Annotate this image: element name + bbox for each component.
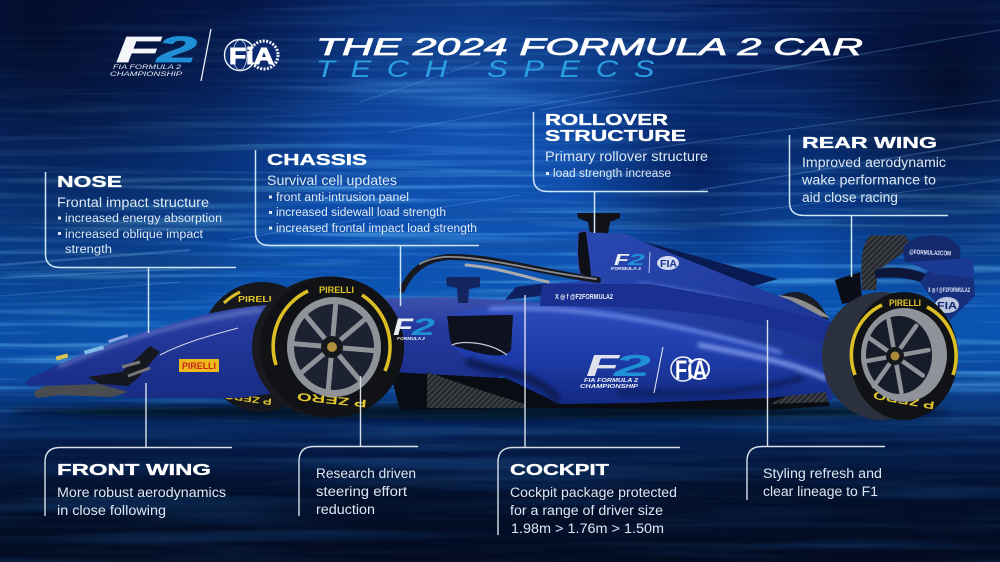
sidepod — [447, 304, 826, 404]
callout: steering: Research driven — [316, 466, 416, 481]
callout: cockpit: 1.98m > 1.76m > 1.50m — [511, 521, 664, 536]
nose details — [56, 328, 238, 386]
logo: F2 championship — [110, 29, 197, 78]
pirelli nose badge: PIRELLI — [182, 361, 216, 372]
callout: chassis — [256, 150, 479, 306]
chassis logo — [393, 314, 436, 341]
mirror — [446, 277, 480, 303]
callout: rear wing: REAR WING — [802, 135, 937, 152]
title — [316, 34, 863, 83]
logo: F2 championship: CHAMPIONSHIP — [110, 71, 183, 78]
callout: rollover structure: ROLLOVER — [545, 112, 669, 129]
logo: F2 championship: 2 — [155, 29, 197, 70]
chassis logo: 2 — [410, 314, 436, 341]
callout: nose: strength — [65, 244, 112, 256]
logo: F2 championship: FIA FORMULA 2 — [113, 64, 182, 71]
callout: cockpit — [498, 295, 680, 536]
callout: rollover structure: Primary rollover structure — [545, 149, 708, 164]
car shadow — [10, 405, 950, 419]
logo divider — [201, 29, 211, 81]
far front wheel: P ZERO — [223, 390, 272, 407]
callout: rear wing: Improved aerodynamic — [802, 155, 946, 170]
callout: rollover structure: STRUCTURE — [545, 128, 686, 145]
callout: rear wing: wake performance to — [801, 172, 936, 188]
rear wing: X ◎ f @F2FORMULA2 — [928, 288, 970, 294]
callout: styling — [747, 320, 885, 500]
far front wheel: PIRELLI — [238, 294, 278, 304]
callout: cockpit: for a range of driver size — [510, 503, 663, 518]
title: THE 2024 FORMULA 2 CAR — [316, 34, 863, 61]
engine cover logos: F — [614, 252, 631, 269]
logo: FIA — [224, 40, 278, 70]
callout: chassis: increased frontal impact load strength — [276, 223, 477, 235]
callout: chassis: front anti-intrusion panel — [276, 192, 409, 204]
engine cover logos: FORMULA 2 — [611, 266, 642, 271]
callout: cockpit: COCKPIT — [510, 462, 609, 479]
sidepod logos: FiA — [675, 355, 707, 385]
logo: F2 championship: F — [116, 29, 162, 70]
callout: front wing: FRONT WING — [57, 462, 211, 479]
callout: rollover structure — [534, 112, 708, 233]
callout: chassis: CHASSIS — [267, 152, 367, 169]
callout: rollover structure: load strength increase — [553, 168, 671, 180]
callout: styling: clear lineage to F1 — [763, 484, 878, 499]
rear wing: FIA — [937, 301, 957, 312]
cockpit rim — [505, 283, 547, 300]
sidepod logos: F — [586, 348, 621, 383]
sidepod logos: CHAMPIONSHIP — [580, 384, 638, 390]
callout: rear wing: aid close racing — [802, 190, 898, 205]
front wheel: PIRELLI — [319, 285, 354, 296]
rear wheel: P ZERO — [872, 388, 936, 411]
front wheel: P ZERO — [296, 390, 367, 409]
car — [10, 213, 975, 420]
shoulder panel — [540, 284, 832, 345]
engine cover logos: FIA — [660, 259, 677, 270]
chassis logo: FORMULA 2 — [397, 336, 426, 341]
callout: front wing — [45, 383, 232, 518]
sidepod logos: FIA FORMULA 2 — [584, 378, 638, 384]
front wheel — [252, 276, 404, 418]
callout: nose: Frontal impact structure — [57, 195, 209, 210]
rear wheel: PIRELLI — [889, 298, 921, 309]
halo — [402, 257, 598, 290]
body highlights — [60, 284, 830, 398]
airbox and roll hoop — [577, 213, 620, 278]
callout: nose: NOSE — [57, 174, 122, 191]
far rear wheel — [757, 292, 833, 398]
callout: chassis: increased sidewall load strength — [276, 207, 446, 219]
callout: steering — [299, 376, 418, 517]
callout: nose: increased oblique impact — [65, 229, 204, 241]
callout: steering: reduction — [316, 502, 375, 517]
engine cover logos — [611, 252, 679, 273]
chassis and nose — [25, 297, 560, 400]
chassis logo: F — [393, 314, 415, 341]
callout: nose — [46, 172, 236, 333]
far front wheel — [200, 282, 324, 412]
callout: steering: steering effort — [316, 484, 407, 499]
logo: FIA: FiA — [229, 43, 274, 69]
callout: rear wing — [790, 135, 948, 277]
sidepod inlet — [447, 315, 513, 355]
callout: front wing: More robust aerodynamics — [57, 485, 226, 500]
front wing — [34, 384, 128, 398]
rear wheel — [822, 292, 958, 420]
callout: styling: Styling refresh and — [763, 466, 882, 481]
callout: chassis: Survival cell updates — [267, 173, 397, 188]
sidepod logos — [580, 347, 709, 393]
engine cover logos: 2 — [626, 252, 645, 269]
callout: front wing: in close following — [57, 503, 166, 518]
rear wing: @FORMULA2COM — [909, 249, 951, 257]
callout: cockpit: Cockpit package protected — [510, 485, 677, 500]
social handles: X ◎ f @F2FORMULA2 — [555, 294, 613, 301]
rear wing — [835, 235, 975, 320]
engine cover — [540, 232, 832, 400]
title: TECH SPECS — [316, 56, 670, 83]
engine cover fin — [624, 236, 778, 287]
callout: nose: increased energy absorption — [65, 213, 222, 225]
sidepod logos: 2 — [612, 348, 651, 383]
floor and carbon — [390, 372, 830, 410]
